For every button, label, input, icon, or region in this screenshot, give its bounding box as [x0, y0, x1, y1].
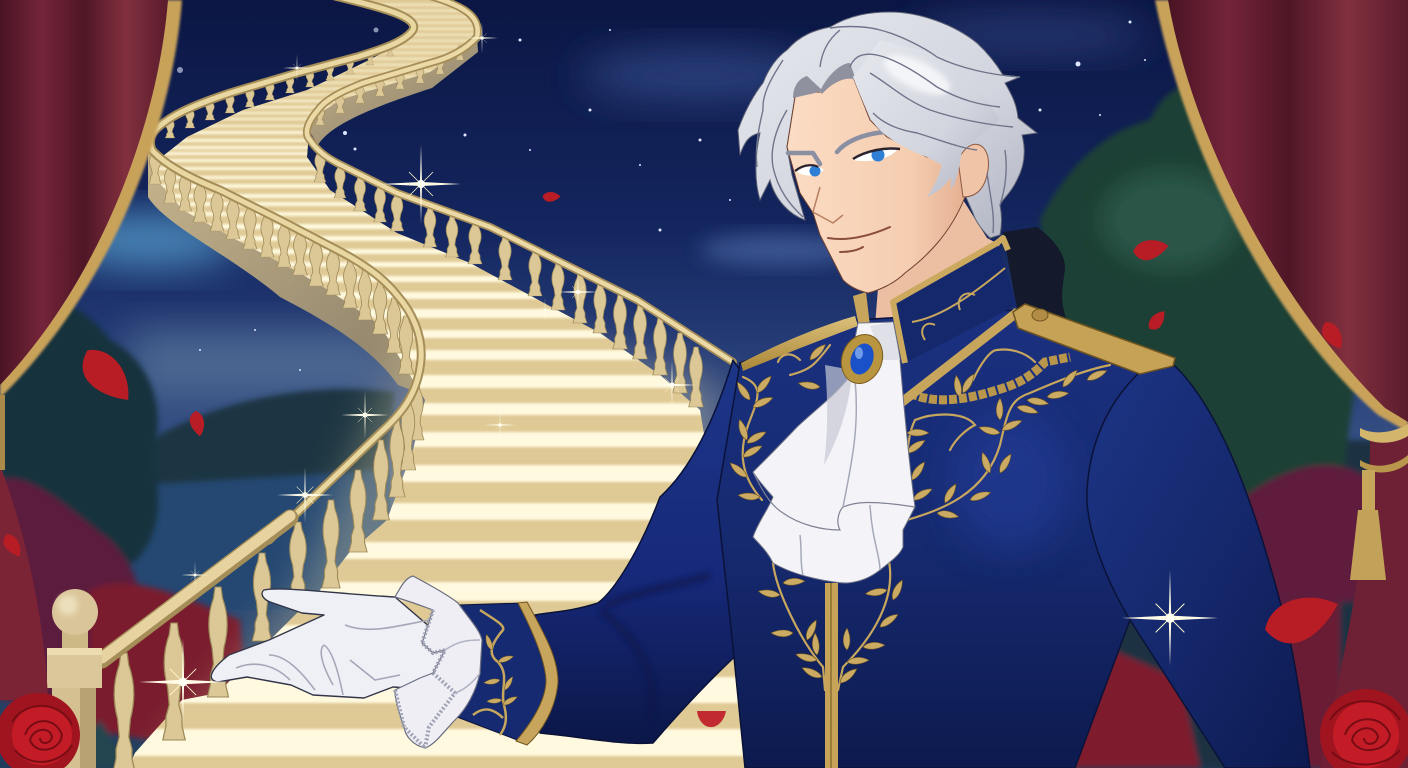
- brooch: [835, 329, 889, 389]
- body highlight: [950, 410, 1070, 550]
- gold centre placket: [825, 583, 838, 768]
- right sleeve: [1087, 366, 1310, 768]
- staircase underside: [148, 35, 478, 395]
- far hills and lake: [120, 389, 395, 610]
- collar and shoulder trim: [741, 238, 1020, 408]
- figure: arm and torso: [535, 195, 1310, 768]
- nose: [813, 187, 843, 223]
- lace cuff: [395, 576, 482, 748]
- staircase steps: [132, 0, 744, 768]
- cravat: [753, 322, 915, 583]
- curtain tieback and tassel: [1350, 424, 1408, 580]
- epaulette: [1013, 304, 1175, 374]
- right curtain: [1155, 0, 1408, 768]
- left sleeve: [535, 360, 760, 743]
- newel post: [47, 589, 102, 768]
- left eye: [795, 165, 824, 176]
- mouth: [828, 227, 890, 252]
- face: [787, 76, 989, 293]
- staircase glow: [150, 300, 740, 768]
- gold leaves: [728, 342, 1108, 685]
- right eye: [853, 148, 900, 162]
- cuff: [457, 602, 558, 745]
- gold flower chain: [910, 357, 1070, 400]
- front hair strands: [756, 27, 1020, 233]
- balusters: far rails: [165, 42, 464, 138]
- neck: [875, 195, 1000, 332]
- falling rose petals: [0, 189, 1350, 727]
- ear: [958, 144, 989, 197]
- glove: [211, 589, 445, 698]
- eyebrows: [788, 132, 905, 164]
- sparkles: [139, 22, 1218, 726]
- right tree and flowering bushes: [1040, 84, 1408, 768]
- black ribbon: [1003, 227, 1066, 318]
- coat body: [717, 310, 1145, 768]
- gold embroidery stems on coat: [743, 285, 1110, 690]
- sleeve folds: [600, 575, 710, 720]
- right corner rose: [1320, 689, 1408, 768]
- balusters: left rail: [113, 150, 424, 768]
- left curtain: [0, 0, 182, 700]
- handrails: [102, 0, 733, 660]
- left corner rose: [0, 693, 80, 768]
- hair back: [738, 12, 1037, 238]
- balusters: right rail: [314, 150, 703, 407]
- stars: [164, 20, 1146, 396]
- left trees and flowering bushes: [0, 294, 245, 768]
